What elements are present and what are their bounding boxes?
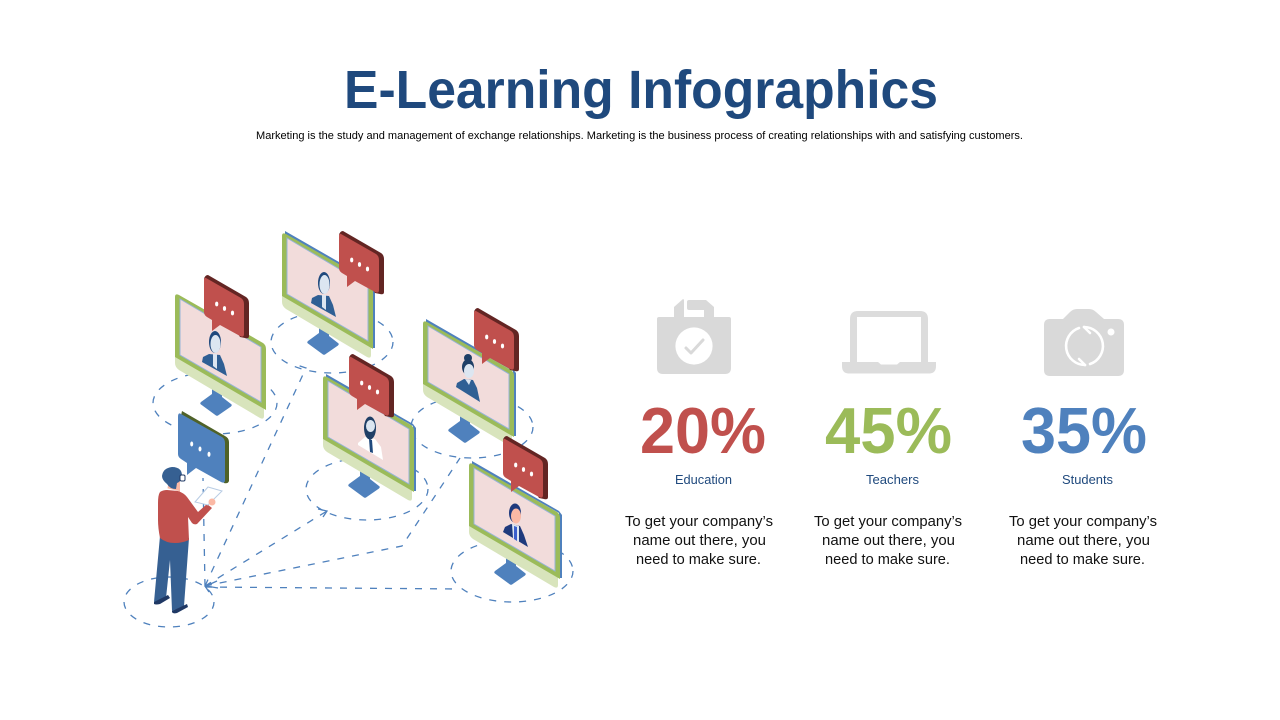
description [1009,514,1157,568]
avatar: man in grey suit [311,272,336,317]
person with tablet [154,467,222,613]
title: E-Learning Infographics [344,60,938,120]
description: To get your company’s [814,514,962,530]
illustration: e-learning network [124,231,573,627]
stat: students [1009,394,1157,568]
monitor: centre [323,354,416,501]
speech bubble [474,308,519,371]
description: need to make sure. [636,552,761,568]
avatar: man in blue suit [202,331,227,376]
monitor: top centre [282,231,384,358]
description: name out there, you [1017,533,1150,549]
label: Teachers [866,473,919,487]
stat: teachers [814,394,962,568]
speech bubble [503,436,548,499]
percentage: 35% [1021,394,1147,467]
description [814,514,962,568]
description: name out there, you [633,533,766,549]
icon: laptop [842,311,936,374]
speech bubble [204,275,249,338]
avatar: woman with bun [456,354,480,402]
percentage: 20% [640,394,766,467]
description: need to make sure. [825,552,950,568]
description: To get your company’s [1009,514,1157,530]
monitor: left [175,275,266,419]
monitor: right lower [469,436,562,588]
icon: bag with check [657,299,731,374]
description: need to make sure. [1020,552,1145,568]
subtitle: Marketing is the study and management of exchange relationships. Marketing is the business process of creating relationships with and satisfying customers. [256,130,1023,142]
blue speech bubble [178,411,229,483]
monitor: right upper [423,308,519,446]
description: name out there, you [822,533,955,549]
label: Education [675,473,732,487]
avatar: bearded man in white shirt [358,416,383,460]
stat: education [625,394,773,568]
percentage: 45% [825,394,952,467]
label: Students [1062,473,1113,487]
dashed connection lines [124,311,573,627]
speech bubble [339,231,384,294]
avatar: man in navy suit [503,504,528,547]
icon: camera with refresh arrows [1044,309,1124,376]
speech bubble [349,354,394,417]
description: To get your company’s [625,514,773,530]
description [625,514,773,568]
